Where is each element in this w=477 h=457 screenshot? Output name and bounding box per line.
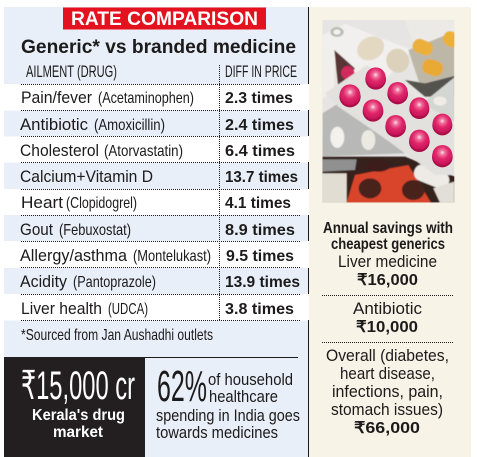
red banner: rate comparison: RATE COMPARISON: [71, 9, 258, 30]
row: calcium: [20, 167, 298, 186]
row: liver health: (UDCA): [108, 301, 148, 318]
row: gout: 8.9 times: [225, 222, 295, 239]
pink tablets: [339, 67, 453, 167]
row: allergy: [20, 246, 294, 265]
callout: 62% household spending: healthcare: [209, 388, 278, 406]
row: calcium: Calcium+Vitamin D: [20, 167, 153, 186]
panel: Kerala's drug market: [4, 357, 145, 457]
row: pain/fever: Pain/fever: [21, 88, 92, 107]
row: antibiotic: Antibiotic: [20, 115, 88, 134]
row: antibiotic: 2.4 times: [225, 117, 294, 134]
callout: 62% household spending: towards medicines: [156, 424, 278, 442]
row: pain/fever: 2.3 times: [225, 90, 293, 107]
saving: overall: [326, 347, 449, 437]
row: liver health: [21, 299, 294, 318]
row: liver health: 3.8 times: [225, 301, 294, 318]
row: heart: 4.1 times: [225, 195, 291, 212]
saving: liver medicine: [338, 253, 437, 289]
panel: annual savings: [309, 7, 471, 457]
footnote: *Sourced from Jan Aushadhi outlets: [21, 327, 213, 344]
row: heart: [21, 193, 291, 212]
row: allergy: 9.5 times: [226, 248, 294, 265]
row: cholesterol: [20, 141, 295, 160]
subheading: annual savings: Annual savings with: [323, 220, 453, 237]
row: heart: (Clopidogrel): [66, 195, 137, 212]
row: calcium: 13.7 times: [225, 169, 298, 186]
panel: rate comparison table: [4, 7, 308, 457]
row: pain/fever: (Acetaminophen): [98, 90, 194, 107]
row: heart: Heart: [21, 193, 63, 212]
saving: liver medicine: Liver medicine: [338, 253, 437, 271]
saving: antibiotic: [353, 300, 422, 336]
row: cholesterol: Cholesterol: [20, 141, 99, 160]
saving: overall: stomach issues): [331, 401, 443, 419]
row: acidity: [20, 272, 300, 291]
photo: medicine blister packs: [322, 20, 462, 203]
saving: overall: infections, pain,: [332, 383, 443, 401]
saving: antibiotic: Antibiotic: [353, 300, 422, 318]
saving: overall: ₹66,000: [354, 420, 420, 437]
panel: Kerala's drug market: market: [53, 424, 103, 441]
callout: 62% household spending: spending in India goes: [156, 407, 300, 425]
heading: generic vs branded: Generic* vs branded medicine: [21, 36, 296, 58]
callout: 62% household spending: 62%: [157, 362, 207, 411]
saving: liver medicine: ₹16,000: [357, 272, 418, 289]
row: allergy: (Montelukast): [133, 248, 211, 265]
saving: antibiotic: ₹10,000: [356, 319, 418, 336]
row: gout: (Febuxostat): [59, 222, 131, 239]
row: gout: [20, 220, 295, 239]
row: cholesterol: 6.4 times: [225, 143, 295, 160]
callout: 62% household spending: [156, 362, 300, 442]
table header: AILMENT (DRUG): [26, 63, 117, 81]
row: pain/fever: [21, 88, 293, 107]
row: gout: Gout: [20, 220, 53, 239]
callout: 62% household spending: of household: [208, 371, 293, 389]
table header: [26, 63, 297, 81]
row: antibiotic: (Amoxicillin): [94, 117, 165, 134]
saving: overall: heart disease,: [340, 365, 435, 383]
panel: Kerala's drug market: Kerala's drug: [32, 407, 125, 424]
row: cholesterol: (Atorvastatin): [104, 143, 183, 160]
row: allergy: Allergy/asthma: [20, 246, 128, 265]
row: liver health: Liver health: [21, 299, 102, 318]
saving: overall: Overall (diabetes,: [326, 347, 449, 365]
table header: DIFF IN PRICE: [225, 63, 297, 81]
panel: Kerala's drug market: ₹15,000 cr: [21, 364, 135, 408]
row: acidity: Acidity: [20, 272, 67, 291]
row: antibiotic: [20, 115, 294, 134]
row: acidity: (Pantoprazole): [73, 274, 156, 291]
row: acidity: 13.9 times: [225, 274, 300, 291]
subheading: annual savings: cheapest generics: [331, 236, 445, 253]
subheading: annual savings: [323, 220, 453, 253]
